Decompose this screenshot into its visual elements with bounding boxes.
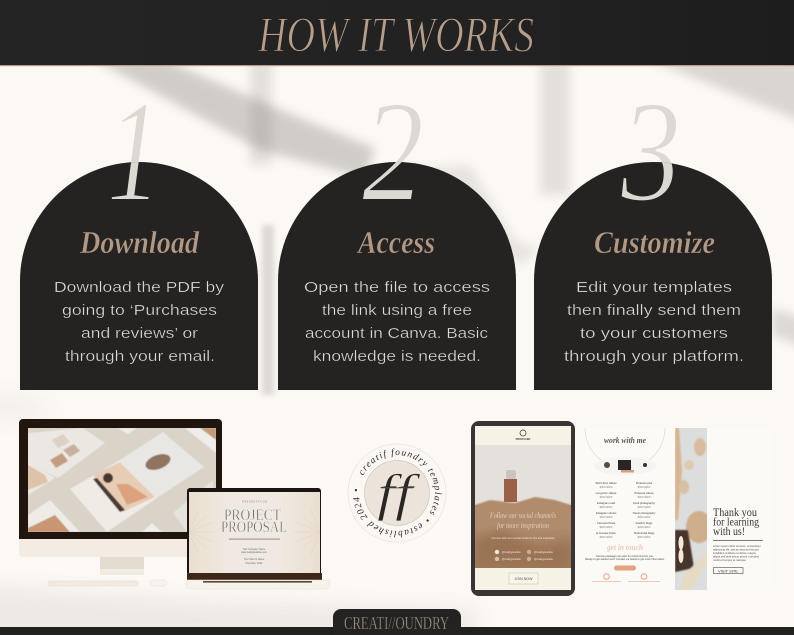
body text (54, 280, 225, 365)
tablet photo: @reallygreatsite (502, 557, 521, 561)
tablet button: JOIN NOW (515, 577, 533, 581)
page service list: $000-$000 (600, 485, 613, 489)
body text: then finally send them (567, 303, 741, 319)
laptop slide text: Due Date: 2024 (246, 562, 263, 565)
page thank you body: incididunt ut labore et dolore magna (713, 551, 756, 555)
page service list: $000-$000 (600, 505, 613, 509)
page service list: $000-$000 (600, 515, 613, 519)
panel: step 3 customize (534, 162, 772, 390)
body text: knowledge is needed. (313, 349, 481, 365)
tablet button (509, 573, 538, 584)
page service list: $000-$000 (638, 525, 651, 529)
page thank you heading: for learning (713, 514, 759, 528)
page service list: $000-$000 (600, 525, 613, 529)
page service list: $000-$000 (638, 535, 651, 539)
number strokes over arches: 1 (107, 72, 161, 232)
number strokes over arches: 2 (362, 72, 424, 232)
tablet photo: @reallygreatsite (534, 550, 553, 554)
tablet photo: Connect with us on social media for tips and inspiration (491, 536, 555, 540)
body text: account in Canva. Basic (305, 326, 488, 342)
slide sun rays (189, 510, 320, 554)
page service list: Long-form videos (596, 491, 617, 495)
laptop slide text: Your Company Name (243, 548, 266, 551)
brochure page: work with me (585, 428, 665, 590)
page service list: Travel photography (632, 511, 656, 515)
page thank you heading: with us! (713, 524, 745, 538)
laptop (186, 488, 330, 589)
heading: Customize (594, 224, 715, 260)
page service list: Carousel Posts (597, 521, 616, 525)
page visit site button (714, 568, 743, 574)
body text: through your platform. (564, 349, 744, 365)
body text: the link using a free (322, 303, 472, 319)
laptop slide text: Your Client's Name (244, 558, 265, 561)
tablet photo (475, 445, 571, 568)
body text: Edit your templates (576, 280, 732, 296)
page service list: $000-$000 (600, 535, 613, 539)
laptop slide text: PROPOSAL (221, 519, 287, 536)
tablet headline: Follow our social channels (489, 511, 556, 520)
page thank you body: aliqua sed ante ipsum primis. Interdum (713, 554, 760, 558)
number strokes over arches (112, 162, 674, 200)
page visit site button: VISIT SITE (718, 568, 738, 574)
page contact button (614, 566, 636, 570)
page thank you body (713, 544, 761, 562)
page desk photo (594, 457, 656, 475)
badge monogram: ff (377, 465, 421, 522)
page photo of dried flowers (675, 428, 707, 590)
number 2: 2 (362, 72, 424, 232)
number strokes over arches: 3 (620, 72, 681, 232)
page service list: Fashion blogs (636, 521, 653, 525)
heading: Download (79, 224, 200, 260)
panel: step 2 access (278, 162, 516, 390)
monitor screen: magazine photo (28, 428, 216, 532)
page thank you heading: Thank you (713, 505, 757, 519)
page service list (595, 481, 656, 539)
panel: step 1 download (20, 162, 258, 390)
page service list: Food photography (633, 501, 656, 505)
page get in touch: get in touch (606, 543, 643, 552)
body text: through your email. (65, 349, 215, 365)
title: HOW IT WORKS (257, 6, 534, 62)
body text (564, 280, 744, 365)
brand wordmark: CREATI//OUNDRY (344, 613, 449, 633)
page service list: Pinterest videos (634, 491, 654, 495)
number 3: 3 (620, 72, 681, 232)
header band (0, 0, 794, 66)
page service list: $000-$000 (638, 505, 651, 509)
badge ring text: creatif foundry templates • established 2024 • (353, 448, 442, 538)
page service list: Instagram reels (597, 501, 616, 505)
page contact icons (592, 574, 660, 582)
monitor (19, 419, 222, 575)
page service list: Pinterest pins (636, 481, 653, 485)
laptop slide text (221, 500, 287, 565)
tablet photo: for more inspiration (497, 521, 549, 530)
page service list: Short-form videos (595, 481, 617, 485)
tablet photo: @reallygreatsite (534, 557, 553, 561)
brochure page: work with me: Ready to get started now? Contact me below to get more information. (585, 557, 665, 561)
laptop slide text: PROJECT (224, 507, 281, 524)
page service list: Instagram stories (596, 511, 617, 515)
page thank you body: morbi et tempus at natoque. (713, 558, 747, 562)
page thank you body: adipiscing elit, sed do eiusmod tempor (713, 548, 759, 552)
laptop slide text: PRESENTATION (242, 500, 268, 504)
body text: to your customers (580, 326, 728, 342)
tablet photo: @reallygreatsite (502, 550, 521, 554)
desktop and laptop mockup (19, 419, 330, 589)
tablet logo: PRODUCER (516, 437, 531, 441)
page thank you heading (713, 505, 759, 538)
page service list: Testimonial blogs (634, 531, 655, 535)
page service list: $000-$000 (638, 485, 651, 489)
page service list: $000-$000 (638, 495, 651, 499)
page service list: $000-$000 (638, 515, 651, 519)
body text: and reviews’ or (81, 326, 198, 342)
circular badge logo (348, 444, 446, 542)
number 1: 1 (107, 72, 161, 232)
page thank you body: Lorem ipsum dolor sit amet, consectetur (713, 544, 761, 548)
page service list: $000-$000 (600, 495, 613, 499)
tablet logo (516, 430, 531, 441)
footer band with logo tab (0, 609, 794, 635)
brochure page: thank you (675, 428, 763, 590)
large step numbers (107, 72, 681, 232)
laptop slide text: www.reallygreatsite.com (241, 551, 267, 554)
page service list: E-minutes Posts (596, 531, 616, 535)
body text (304, 280, 490, 365)
body text: Open the file to access (304, 280, 490, 296)
brochure page: work with me: Service packages can also be customized for you. (596, 554, 654, 558)
body text: Download the PDF by (54, 280, 225, 296)
heading: Access (356, 224, 435, 260)
tablet mockup (471, 421, 575, 596)
keyboard and mouse (48, 580, 167, 586)
page heading: work with me (604, 435, 646, 445)
body text: going to ‘Purchases (62, 303, 217, 319)
